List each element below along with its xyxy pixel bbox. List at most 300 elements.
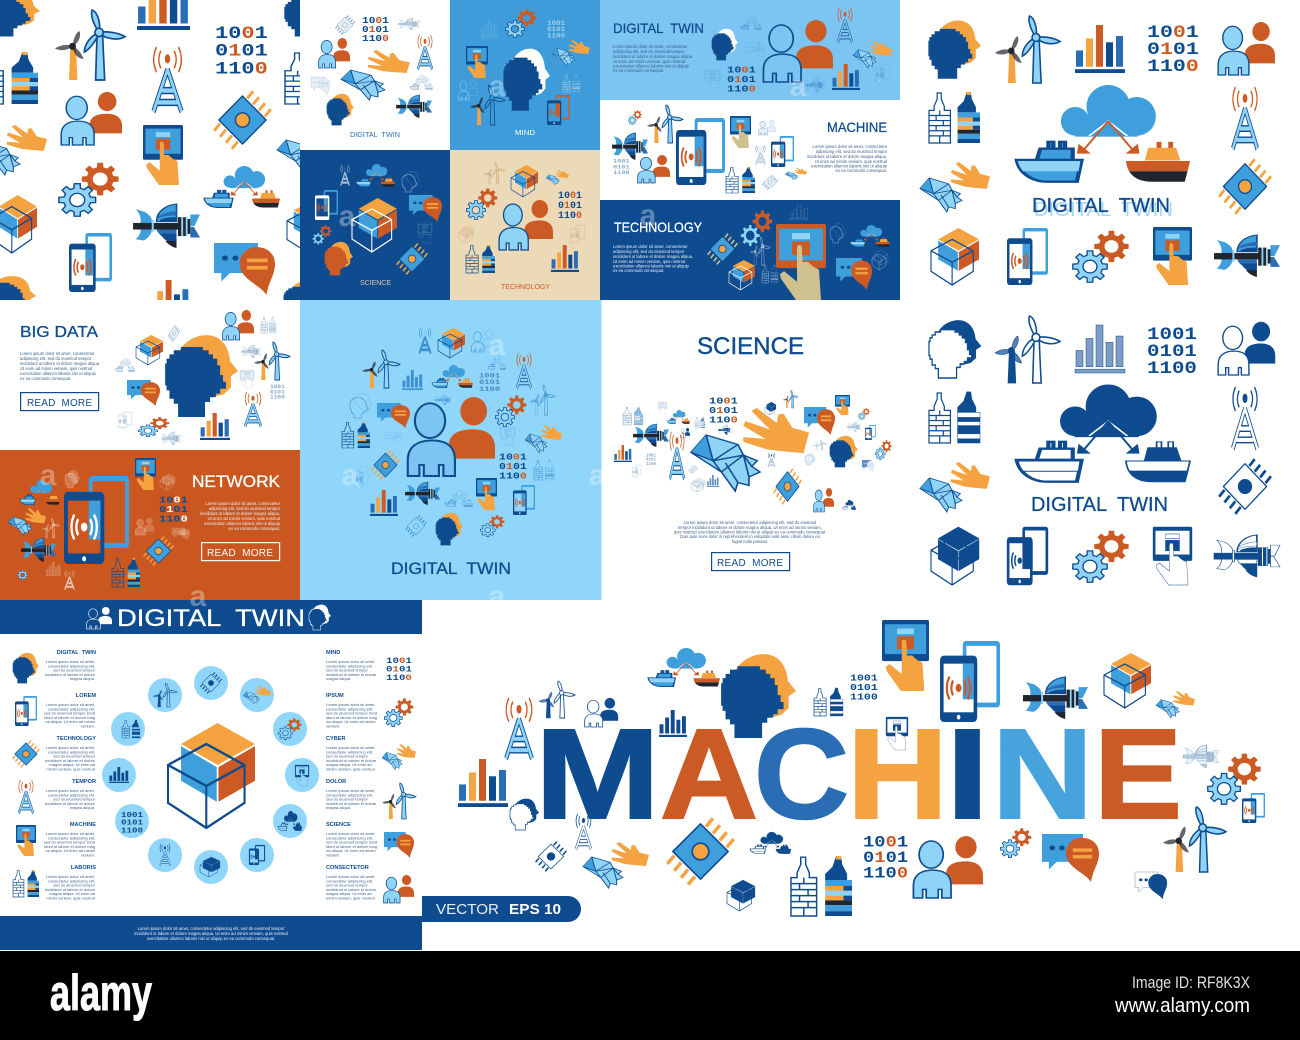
badge: vector eps 10 bbox=[422, 896, 581, 922]
icon: gears bbox=[138, 417, 169, 437]
icon: binary digits: 1001 bbox=[215, 23, 268, 43]
item: digital twin: DIGITAL TWIN bbox=[57, 650, 96, 656]
icon: gears faint bbox=[312, 225, 332, 245]
icon: head rust bbox=[325, 242, 353, 275]
icon: signal tower bbox=[153, 47, 182, 112]
heading: DIGITAL TWIN bbox=[391, 559, 511, 578]
chart: bars top bbox=[137, 0, 190, 30]
icon: binary faint: 1001 bbox=[547, 20, 565, 28]
icon: binary: 0101 bbox=[499, 462, 527, 472]
icon: cloud and ships bbox=[432, 365, 473, 388]
icon: tower faint bbox=[341, 165, 349, 186]
icon: buildings right bbox=[284, 52, 300, 105]
icon: cube faint bbox=[872, 250, 888, 270]
item: tempor: sed do eiusmod tempor bbox=[53, 797, 96, 802]
icon: chip bbox=[214, 91, 271, 149]
icon: tower faint bbox=[756, 145, 765, 165]
item: consectetor: minim veniam, quis nostrud bbox=[326, 896, 375, 900]
icon: people small bbox=[680, 428, 690, 438]
icon: chip bbox=[774, 469, 801, 504]
icon: cloud ships bbox=[356, 164, 395, 187]
chart: bars bbox=[1075, 25, 1125, 73]
icon: chip bbox=[708, 234, 737, 264]
chart: bars bbox=[200, 413, 230, 440]
icon: people faint bbox=[471, 330, 495, 352]
icon: head faint bbox=[350, 394, 372, 418]
icon: chat bbox=[377, 403, 410, 428]
icon: people faint bbox=[458, 80, 478, 100]
icon: binary faint bbox=[270, 384, 285, 400]
item: machine: na aliqua. Ut enim ad minim bbox=[45, 848, 96, 853]
item: mind bbox=[326, 650, 412, 683]
item: lorem: idunt ut labore et dolore mag bbox=[44, 715, 95, 720]
icon: turbines bbox=[362, 350, 400, 388]
item: consectetor bbox=[326, 865, 414, 903]
icon: head line bbox=[402, 172, 420, 192]
stock watermark letters: a bbox=[342, 459, 359, 492]
icon: origami bbox=[8, 517, 32, 535]
icon: binary faint: 1100 bbox=[479, 386, 500, 394]
icon: binary: 1001 bbox=[863, 835, 908, 852]
panel: science square bbox=[300, 150, 450, 300]
icon: chip bbox=[1219, 159, 1271, 214]
icon: head top left bbox=[0, 0, 40, 36]
icon: binary: 1100 bbox=[850, 692, 878, 703]
icon: head bottom left bbox=[0, 276, 36, 300]
icon: tablet bbox=[476, 478, 497, 510]
icon: binary: 1100 bbox=[709, 415, 738, 426]
item: lorem: sed do eiusmod tempor incid bbox=[44, 711, 95, 716]
item: ipsum: veniam. bbox=[326, 724, 340, 728]
icon: drone small bbox=[718, 425, 732, 435]
item: mind: 1100 bbox=[386, 673, 412, 683]
icon: big head bbox=[166, 335, 238, 416]
icon: people navy bbox=[585, 698, 618, 727]
title: DIGITAL TWIN bbox=[117, 605, 305, 632]
icon: head bbox=[929, 320, 981, 378]
text block: Lorem ipsum dolor sit amet, consectetur adipiscing elit, sed do eiusmod bbox=[684, 520, 817, 525]
item: dolor bbox=[326, 779, 416, 819]
panel: machine banner bbox=[600, 100, 900, 200]
icon: cube bbox=[931, 228, 979, 285]
icon: buildings bbox=[814, 688, 843, 716]
icon: chip faint bbox=[688, 465, 698, 474]
heading: MACHINE bbox=[827, 119, 887, 135]
icon: tower faint bbox=[419, 328, 431, 353]
icon: big hand bbox=[743, 408, 809, 453]
icon: binary bbox=[863, 835, 908, 883]
icon: phones bbox=[547, 95, 570, 125]
item: consectetor: CONSECTETOR bbox=[326, 865, 369, 871]
icon: cloud navy bbox=[842, 500, 856, 510]
icon: binary faint: 1001 bbox=[613, 158, 630, 164]
item: cyber bbox=[326, 736, 416, 772]
stock watermark letters bbox=[40, 70, 807, 613]
panel: monochrome icon set bbox=[920, 316, 1280, 585]
icon: big people bbox=[408, 397, 495, 476]
panel: big data bbox=[0, 300, 300, 450]
title banner bbox=[0, 600, 422, 634]
item: lorem: consectetur adipiscing elit, bbox=[48, 706, 95, 711]
icon: cube bbox=[511, 165, 538, 197]
icon: gears bbox=[278, 718, 301, 740]
icon: hands bbox=[243, 686, 271, 704]
item: tempor: TEMPOR bbox=[72, 779, 96, 785]
button: read more bbox=[202, 543, 280, 561]
text block: Lorem ipsum dolor sit amet, consectetur bbox=[813, 144, 888, 149]
icon: origami hand left bbox=[0, 143, 20, 175]
icon: cloud and ships bbox=[1017, 85, 1190, 182]
icon: gears bbox=[505, 9, 536, 38]
text block: Ut enim ad minim veniam, quis nostrud bbox=[20, 366, 93, 371]
icon: tablet bbox=[295, 765, 309, 786]
item: science: na aliqua. Ut enim ad minim bbox=[326, 848, 376, 853]
icon: drone bbox=[1214, 235, 1280, 277]
item: cyber: CYBER bbox=[326, 736, 346, 742]
icon: chip bbox=[144, 537, 173, 565]
item: lorem: LOREM bbox=[76, 693, 96, 699]
icon: cube faint bbox=[691, 478, 705, 492]
stock watermark letters: a bbox=[489, 580, 506, 613]
text block: exercitation ullamco laboris nisi ut aliquip bbox=[613, 64, 690, 68]
item: cyber: Lorem ipsum dolor sit amet, bbox=[326, 745, 375, 750]
icon: cube bbox=[931, 527, 979, 585]
icon: people bbox=[319, 38, 350, 68]
logo: alamy: alamy bbox=[50, 965, 152, 1021]
item: laboris: magna aliqua. Ut enim ad bbox=[49, 891, 95, 896]
icon: binary faint bbox=[613, 158, 630, 176]
item: laboris: consectetur adipiscing elit, bbox=[48, 878, 95, 883]
item: science: SCIENCE bbox=[326, 822, 351, 828]
icon: tower bbox=[670, 432, 684, 479]
icon: binary bbox=[1147, 23, 1199, 76]
icon: chat bbox=[804, 407, 835, 435]
icon: cube bbox=[1104, 653, 1151, 708]
panel: mind square bbox=[450, 0, 600, 150]
item: ipsum: Lorem ipsum dolor sit amet, bbox=[326, 702, 375, 707]
icon: head white back bbox=[504, 49, 550, 110]
item: dolor: magna aliqua. bbox=[326, 805, 351, 810]
item: consectetor: magna aliqua. Ut enim ad bbox=[326, 891, 372, 896]
icon: buildings bbox=[929, 392, 980, 443]
icon: binary: 1001 bbox=[709, 397, 738, 407]
footer bar: incididunt ut labore et dolore magna aliqua. Ut enim ad minim veniam, quis nostrud bbox=[134, 931, 288, 936]
title: machine letters: M bbox=[535, 703, 660, 846]
icon: phones faint bbox=[118, 412, 132, 428]
icon: origami hand bbox=[341, 70, 385, 100]
icon: binary: 1100 bbox=[558, 211, 582, 222]
item: digital twin: Lorem ipsum dolor sit amet, bbox=[46, 659, 95, 664]
icon: big origami hand bbox=[691, 435, 760, 491]
item: ipsum: IPSUM bbox=[326, 693, 344, 699]
item: tempor: incididunt ut labore et dolore bbox=[45, 801, 96, 806]
icon: gears bbox=[875, 440, 892, 460]
item: laboris: incididunt ut labore et dolore bbox=[45, 887, 96, 892]
heading: NETWORK bbox=[192, 472, 281, 491]
icon: head bbox=[327, 94, 354, 125]
icon: chat faint bbox=[385, 432, 402, 443]
title: machine letters: A bbox=[660, 703, 758, 846]
icon: chat faint bbox=[172, 528, 190, 540]
icon: tower bbox=[1233, 387, 1257, 449]
icon: binary: 1001 bbox=[121, 811, 143, 820]
icon: phones bbox=[315, 190, 338, 220]
text block: incididunt ut labore et dolore magna aliqua. bbox=[200, 511, 280, 516]
icon: binary: 0101 bbox=[709, 406, 738, 416]
panel: network bbox=[0, 450, 300, 600]
icon: cloud ships bbox=[850, 225, 890, 247]
icon: gears bbox=[1073, 231, 1129, 282]
heading: DIGITAL TWIN bbox=[1031, 494, 1168, 516]
icon: cloud and ships bbox=[20, 480, 60, 505]
icon: people bbox=[913, 836, 983, 898]
text block: ex ea commodo consequat. bbox=[613, 268, 664, 273]
icon: binary faint bbox=[547, 20, 565, 40]
text block: fugiat nulla pariatur. bbox=[732, 539, 768, 544]
icon: gears bbox=[1073, 531, 1129, 582]
item: machine: consectetur adipiscing elit, bbox=[48, 835, 95, 840]
item: ipsum: sed do eiusmod tempor incid bbox=[326, 711, 377, 716]
icon: binary: 1100 bbox=[1147, 57, 1199, 76]
item: dolor: DOLOR bbox=[326, 779, 346, 785]
item: cyber: sed do eiusmod tempor bbox=[326, 754, 368, 759]
item: ipsum: idunt ut labore et dolore mag bbox=[326, 715, 377, 720]
icon: binary: 1100 bbox=[499, 471, 527, 482]
item: lorem: Lorem ipsum dolor sit amet, bbox=[46, 702, 95, 707]
icon: hand bbox=[25, 508, 46, 523]
icon: drone bbox=[1214, 535, 1280, 577]
item: dolor: consectetur adipiscing elit, bbox=[326, 792, 373, 797]
chart: bars bottom bbox=[157, 280, 188, 300]
text block: ex ea commodo consequat. bbox=[229, 526, 280, 531]
item: tempor bbox=[19, 779, 96, 813]
icon: cloud and ships bbox=[648, 648, 720, 686]
item: digital twin: magna aliqua. bbox=[70, 676, 95, 681]
icon: buildings bbox=[929, 92, 980, 143]
item: mind: 1001 bbox=[386, 656, 412, 666]
icon: gears faint bbox=[628, 110, 642, 125]
text block: quis nostrud exercitation ullamco laboris nisi ut aliquip ex ea commodo consequat. bbox=[674, 530, 826, 534]
icon: tower bbox=[838, 8, 852, 42]
icon: cloud ships bbox=[278, 811, 302, 831]
icon: drone bbox=[633, 424, 669, 447]
item: technology: minim veniam, quis nostrud bbox=[46, 766, 95, 772]
icon: phones bbox=[69, 233, 112, 292]
icon: chat bbox=[1042, 834, 1099, 882]
icon: drone bbox=[1023, 677, 1088, 719]
stock watermark letters: a bbox=[640, 199, 657, 232]
item: lorem bbox=[15, 693, 96, 728]
icon: tablet small bbox=[658, 402, 667, 414]
text block: Ut enim ad minim veniam, quis nostrud bbox=[208, 516, 281, 521]
icon: cube bbox=[438, 328, 465, 358]
icon: head outline bbox=[309, 605, 331, 630]
icon: binary bbox=[850, 673, 878, 703]
panel: seamless icon pattern bbox=[0, 0, 300, 300]
item: dolor: Lorem ipsum dolor sit amet, bbox=[326, 788, 375, 793]
footer bar: Lorem ipsum dolor sit amet, consectetur adipiscing elit, sed do eiusmod tempor bbox=[138, 926, 285, 931]
icon: tower faint bbox=[768, 453, 775, 467]
icon: turbines faint bbox=[42, 518, 60, 538]
icon: chat outline bbox=[311, 77, 330, 95]
icon: tablet with beige hand bbox=[730, 116, 751, 148]
icon: buildings left bbox=[0, 52, 38, 104]
panel: digital twin circle bbox=[300, 300, 600, 600]
icon: turbines bbox=[995, 16, 1060, 83]
icon: cloud and ships bbox=[1017, 385, 1190, 482]
label: TECHNOLOGY bbox=[501, 284, 550, 291]
icon: hands navy bbox=[1156, 691, 1195, 718]
icon: origami hand right bbox=[276, 140, 300, 168]
icon: binary: 1001 bbox=[1147, 23, 1199, 42]
text block: adipiscing elit, sed do eiusmod tempor bbox=[20, 356, 92, 361]
item: mind: sed do eiusmod tempor bbox=[326, 668, 368, 673]
icon: central cube bbox=[168, 723, 255, 828]
icon: people bbox=[61, 92, 122, 145]
item: mind: MIND bbox=[326, 650, 340, 656]
icon: turbines bbox=[995, 316, 1060, 383]
icon: binary faint: 1100 bbox=[646, 463, 657, 467]
icon: binary faint: 1001 bbox=[270, 384, 285, 390]
icon: turbines bbox=[153, 683, 177, 707]
icon: drone faint bbox=[162, 432, 181, 445]
title: machine letters: E bbox=[1094, 703, 1182, 846]
icon: drone faint bbox=[1183, 745, 1219, 768]
icon: large tablet touch bbox=[776, 224, 826, 300]
icon: binary: 1100 bbox=[159, 514, 188, 525]
icon: binary faint: 0101 bbox=[613, 164, 630, 170]
icon: binary: 1001 bbox=[727, 66, 756, 76]
left item list bbox=[13, 650, 96, 900]
icon: buildings bbox=[122, 720, 140, 738]
icon: hands bbox=[552, 40, 590, 66]
item: digital twin: consectetur adipiscing elit, bbox=[48, 663, 95, 668]
text block: Lorem ipsum dolor sit amet, consectetur bbox=[206, 501, 281, 506]
chart: bars faint bbox=[46, 562, 61, 576]
icon: cube faint bbox=[459, 225, 474, 243]
icon: wind turbines bbox=[55, 10, 125, 80]
item: consectetor: Lorem ipsum dolor sit amet, bbox=[326, 874, 375, 879]
icon: chat bbox=[409, 195, 442, 222]
item: cyber: magna aliqua. Ut enim ad bbox=[326, 762, 372, 767]
icon: drone outline bbox=[399, 18, 420, 30]
icon: binary: 0101 bbox=[1147, 342, 1197, 361]
icon: binary: 0101 bbox=[159, 505, 188, 515]
icon: binary: 1100 bbox=[863, 866, 908, 883]
item: cyber: consectetur adipiscing elit, bbox=[326, 749, 373, 754]
icon: binary faint: 0101 bbox=[547, 27, 565, 34]
icon: binary faint: 1100 bbox=[547, 33, 565, 40]
title: machine letters: N bbox=[992, 703, 1093, 846]
icon: tower faint bbox=[65, 570, 74, 590]
icon: hand bbox=[612, 842, 649, 866]
item: laboris: Lorem ipsum dolor sit amet, bbox=[46, 874, 95, 879]
item: machine: idunt ut labore et dolore mag bbox=[44, 844, 95, 849]
button: read more: READ MORE bbox=[207, 548, 273, 559]
icon: tablet touch bbox=[882, 620, 929, 691]
icon: phones faint bbox=[355, 467, 368, 488]
icon: people bbox=[763, 20, 833, 82]
panel: machine wordmark bbox=[458, 620, 1265, 916]
stock watermark letters: a bbox=[790, 70, 807, 103]
icon: chat faint bbox=[862, 460, 874, 472]
icon: head top right bbox=[284, 0, 300, 36]
icon: drone bbox=[21, 538, 56, 562]
item: technology bbox=[13, 736, 96, 772]
icon: head bbox=[436, 513, 463, 545]
icon: cube small bbox=[765, 402, 776, 415]
stock watermark letters: a bbox=[339, 200, 356, 233]
icon: people outline bbox=[87, 607, 112, 629]
stock watermark letters: a bbox=[489, 70, 506, 103]
text block: incididunt ut labore et dolore magna aliqua. bbox=[613, 54, 693, 59]
icon: chat bbox=[127, 380, 160, 406]
icon: binary bbox=[362, 17, 389, 45]
chart: bars navy bbox=[659, 710, 687, 737]
heading: DIGITAL TWIN bbox=[1032, 195, 1170, 217]
icon: drone bbox=[405, 482, 440, 505]
item: ipsum: consectetur adipiscing elit, bbox=[326, 706, 373, 711]
icon: phones small bbox=[771, 136, 794, 167]
icon: bars faint bbox=[481, 20, 498, 38]
icon: people bbox=[499, 200, 553, 250]
item: lorem: na aliqua. Ut enim ad minim bbox=[45, 719, 96, 724]
stock watermark letters: a bbox=[589, 459, 606, 492]
item: science: Lorem ipsum dolor sit amet, bbox=[326, 831, 375, 836]
icon: hand faint bbox=[546, 170, 569, 185]
button: read more: READ MORE bbox=[27, 398, 92, 409]
icon: head bbox=[929, 20, 981, 78]
icon: head bottom right bbox=[284, 282, 300, 300]
icon: phones bbox=[1007, 527, 1048, 585]
icon: cube navy bbox=[727, 880, 755, 911]
icon: head faint bbox=[65, 470, 80, 488]
icon: binary bbox=[558, 191, 582, 222]
icon: buildings faint bbox=[762, 265, 778, 283]
icon: tower bbox=[418, 35, 432, 69]
icon: tablet touch bbox=[1153, 227, 1192, 285]
panel: colour icon set bbox=[920, 16, 1280, 285]
icon: chip bbox=[200, 672, 222, 694]
icon: tablet faint bbox=[500, 427, 515, 445]
badge: vector eps 10: EPS 10 bbox=[509, 901, 561, 918]
icon: cube faint bbox=[160, 474, 175, 490]
icon: cloud faint bbox=[115, 358, 135, 372]
icon: chip bbox=[397, 244, 427, 274]
text block: Duis aute irure dolor in reprehenderit in voluptate velit esse cillum dolore eu bbox=[680, 534, 821, 539]
heading: TECHNOLOGY bbox=[614, 219, 703, 235]
text block: adipiscing elit, sed do eiusmod tempor bbox=[816, 149, 888, 154]
icon: cube bbox=[200, 857, 220, 877]
label: DIGITAL TWIN bbox=[350, 132, 400, 139]
stock watermark letters: a bbox=[40, 459, 57, 492]
footer bar: exercitation ullamco laboris nisi ut aliquip ex ea commodo consequat. bbox=[147, 936, 275, 941]
icon: binary bbox=[1147, 324, 1197, 379]
icon: drone bbox=[396, 95, 432, 118]
stock watermark letters: a bbox=[489, 329, 506, 362]
text block: tempor incididunt ut labore et dolore magna aliqua. Ut enim ad minim veniam, bbox=[678, 525, 822, 530]
icon: binary faint: 1001 bbox=[479, 372, 500, 380]
icon: tower bbox=[517, 353, 531, 388]
icon: hands bbox=[853, 41, 892, 68]
item: tempor: consectetur adipiscing elit, bbox=[48, 792, 95, 797]
icon: cloud faint bbox=[740, 17, 762, 30]
text block: incididunt ut labore et dolore magna aliqua. bbox=[807, 154, 887, 159]
icon: buildings bbox=[112, 558, 140, 587]
icon: gears faint bbox=[480, 515, 504, 537]
icon: binary faint: 1001 bbox=[646, 454, 657, 458]
icon: binary: 0101 bbox=[1147, 40, 1199, 59]
